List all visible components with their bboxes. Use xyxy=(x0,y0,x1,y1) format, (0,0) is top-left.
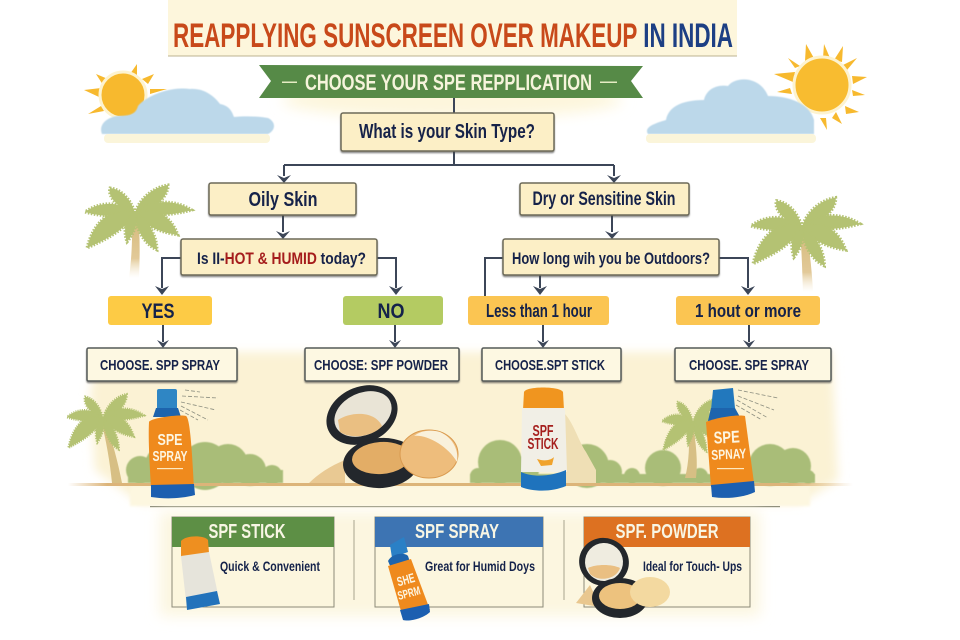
question: skin type: What is your Skin Type? xyxy=(359,121,535,143)
scene: ground backdrop xyxy=(67,352,853,507)
icon: spf stick: SPF xyxy=(532,423,554,440)
icon: sun and cloud right xyxy=(646,44,867,143)
title band background xyxy=(168,0,737,56)
result: powder: CHOOSE: SPF POWDER xyxy=(314,357,448,374)
answer: less than 1 hour: Less than 1 hour xyxy=(486,301,592,321)
icon: spray small: SHE xyxy=(395,570,417,589)
ribbon banner xyxy=(259,65,643,98)
card: spf stick: SPF STICK xyxy=(208,521,286,543)
icon: spray small: SPRM xyxy=(396,583,422,603)
box: dry or sensitive skin: Dry or Sensitine Skin xyxy=(532,189,676,210)
question: hot and humid xyxy=(181,239,377,275)
result: powder xyxy=(305,348,459,381)
icon: palm upper left xyxy=(85,185,192,278)
question: time outdoors xyxy=(503,239,719,275)
icon: compact small xyxy=(572,531,670,618)
lower cream backdrop xyxy=(160,512,760,616)
card dividers xyxy=(354,520,564,600)
box: dry or sensitive skin xyxy=(520,183,689,215)
icon: stick small xyxy=(181,536,220,610)
cream glow behind ribbon xyxy=(282,82,622,118)
icon: spray small xyxy=(388,537,430,621)
ribbon banner: CHOOSE YOUR SPE REPPLICATION xyxy=(305,70,592,95)
answer: less than 1 hour xyxy=(468,296,609,325)
box: oily skin: Oily Skin xyxy=(248,189,318,211)
card: spf spray: SPF SPRAY xyxy=(415,521,499,543)
result: stick xyxy=(482,348,621,381)
icon: spray bottle right: SPE xyxy=(713,427,740,448)
title: REAPPLYING SUNSCREEN OVER MAKEUP IN INDIA xyxy=(173,17,733,55)
result: spray: CHOOSE. SPP SPRAY xyxy=(100,357,220,374)
result: spray xyxy=(87,348,237,381)
answer: no: NO xyxy=(378,300,404,323)
result: spray right xyxy=(675,348,831,381)
card: spf powder: Ideal for Touch- Ups xyxy=(643,558,742,574)
answer: 1 hour or more xyxy=(676,296,820,325)
icon: sun and cloud left xyxy=(84,64,274,143)
answer: 1 hour or more: 1 hout or more xyxy=(695,301,801,321)
icon: palm upper right xyxy=(751,198,860,292)
card: spf spray xyxy=(375,517,543,621)
icon: spray bottle right xyxy=(706,388,778,498)
card: spf stick xyxy=(172,517,334,610)
icon: spray bottle right: SPNAY xyxy=(711,445,747,463)
card: spf powder xyxy=(572,517,750,618)
question: skin type xyxy=(341,113,554,151)
answer: yes xyxy=(108,296,212,325)
icon: powder compact xyxy=(317,374,458,491)
result: spray right: CHOOSE. SPE SPRAY xyxy=(689,357,809,374)
box: oily skin xyxy=(209,183,356,215)
question: time outdoors: How long wih you be Outdoors? xyxy=(512,249,710,268)
card: spf spray: Great for Humid Doys xyxy=(425,558,535,574)
icon: spray bottle left: SPRAY xyxy=(152,448,188,465)
answer: yes: YES xyxy=(142,300,174,323)
question: hot and humid: Is II-HOT & HUMID today? xyxy=(197,249,366,268)
result: stick: CHOOSE.SPT STICK xyxy=(495,357,605,374)
answer: no xyxy=(343,296,443,325)
icon: spray bottle left xyxy=(149,389,218,498)
icon: spray bottle left: SPE xyxy=(158,432,183,449)
flowchart connectors xyxy=(155,98,755,348)
icon: spf stick xyxy=(521,388,567,491)
card: spf powder: SPF. POWDER xyxy=(616,521,719,543)
icon: spf stick: STICK xyxy=(528,436,559,453)
card: spf stick: Quick & Convenient xyxy=(220,558,320,574)
